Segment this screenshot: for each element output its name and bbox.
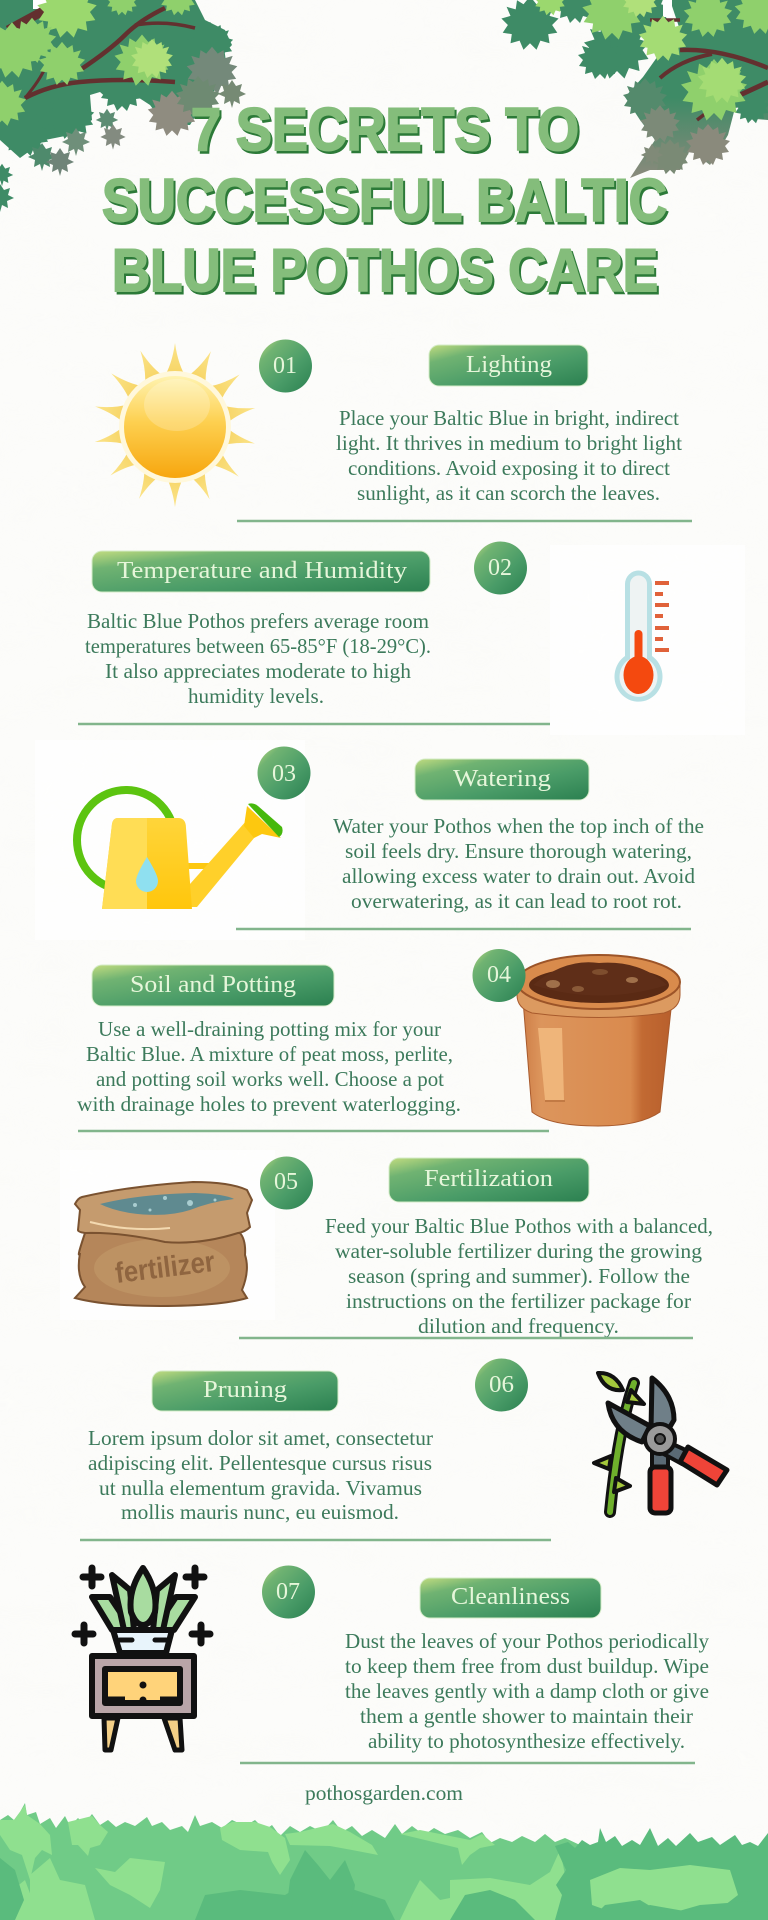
number badge 06	[475, 1358, 528, 1412]
text: fertilization: Feed your Baltic Blue Pothos with a balanced,	[325, 1214, 713, 1238]
text: pruning	[88, 1426, 433, 1524]
icon: sun	[92, 343, 258, 507]
text: watering: allowing excess water to drain out. Avoid	[342, 864, 695, 888]
text: watering: Water your Pothos when the top inch of the	[333, 814, 704, 838]
text: lighting: Place your Baltic Blue in bright, indirect	[339, 406, 679, 430]
text: temperature: humidity levels.	[188, 684, 324, 708]
heading: watering: Watering	[453, 766, 551, 792]
text: watering	[333, 814, 704, 913]
number badge 07	[262, 1566, 315, 1618]
number badge 04: 04	[487, 962, 511, 988]
text: temperature	[85, 609, 431, 708]
text: pruning: ut nulla elementum gravida. Vivamus	[99, 1476, 422, 1500]
text: fertilization	[325, 1214, 713, 1338]
text: cleanliness: ability to photosynthesize effectively.	[368, 1729, 685, 1753]
heading: temperature and humidity: Temperature and Humidity	[117, 558, 407, 584]
text: cleanliness	[345, 1629, 709, 1753]
number badge 07: 07	[276, 1579, 300, 1605]
number badge 02	[474, 542, 527, 594]
heading: watering	[415, 759, 589, 800]
text: soil and potting: Use a well-draining potting mix for your	[98, 1017, 441, 1041]
number badge 05	[260, 1156, 313, 1210]
bottom grass and foliage	[0, 1803, 768, 1920]
text: cleanliness: to keep them free from dust buildup. Wipe	[345, 1654, 709, 1678]
panel: 01 lighting	[92, 340, 692, 521]
icon: fertilizer sack	[75, 1182, 252, 1306]
title: SUCCESSFUL BALTIC	[104, 170, 669, 236]
text: cleanliness: Dust the leaves of your Pothos periodically	[345, 1629, 709, 1653]
title: BLUE POTHOS CARE	[114, 240, 660, 306]
light patch on dark foliage	[590, 1865, 738, 1915]
icon: fertilizer sack: fertilizer	[113, 1246, 217, 1290]
title: 7 SECRETS TO	[191, 96, 579, 163]
text: lighting	[336, 406, 682, 505]
text: fertilization: dilution and frequency.	[418, 1314, 619, 1338]
top left tree canopy	[0, 0, 246, 212]
icon: terracotta pot	[517, 955, 680, 1126]
panel: 05 fertilization	[75, 1156, 713, 1338]
text: fertilization: instructions on the fertilizer package for	[346, 1289, 691, 1313]
heading: fertilization: Fertilization	[424, 1166, 553, 1192]
panel: 03 watering	[77, 746, 704, 929]
panel: 07 cleanliness	[75, 1566, 709, 1763]
text: temperature: It also appreciates moderate to high	[105, 659, 412, 683]
heading: lighting: Lighting	[466, 352, 552, 378]
number badge 01	[259, 340, 312, 392]
text: soil and potting: and potting soil works well. Choose a pot	[96, 1067, 444, 1091]
heading: soil and potting: Soil and Potting	[130, 972, 296, 998]
text: fertilization: season (spring and summer). Follow the	[348, 1264, 690, 1288]
text: temperature: temperatures between 65-85°F (18-29°C).	[85, 634, 431, 658]
light leaf patches	[0, 1805, 578, 1920]
text: pruning: Lorem ipsum dolor sit amet, consectetur	[88, 1426, 433, 1450]
icon: watering can	[77, 790, 283, 909]
heading: pruning	[152, 1371, 338, 1411]
text: soil and potting: with drainage holes to prevent waterlogging.	[77, 1092, 461, 1116]
heading: cleanliness	[420, 1578, 601, 1618]
number badge 03	[258, 746, 310, 800]
number badge 03: 03	[272, 761, 296, 787]
text: watering: overwatering, as it can lead to root rot.	[351, 889, 682, 913]
text: lighting: sunlight, as it can scorch the leaves.	[357, 481, 660, 505]
text: lighting: conditions. Avoid exposing it to direct	[348, 456, 670, 480]
heading: pruning: Pruning	[203, 1377, 287, 1403]
panel: 06 pruning	[80, 1358, 727, 1540]
text: pruning: mollis mauris nunc, eu euismod.	[121, 1500, 399, 1524]
panel: 04 soil and potting	[77, 949, 680, 1131]
text: pruning: adipiscing elit. Pellentesque cursus risus	[88, 1451, 432, 1475]
number badge 04	[472, 949, 526, 1002]
text: temperature: Baltic Blue Pothos prefers average room	[87, 609, 429, 633]
heading: temperature and humidity	[92, 551, 430, 592]
heading: fertilization	[389, 1158, 589, 1202]
icon: pruning shears	[594, 1373, 727, 1513]
text: cleanliness: them a gentle shower to maintain their	[360, 1704, 693, 1728]
top right tree canopy	[501, 0, 768, 178]
text: soil and potting	[77, 1017, 461, 1116]
title	[102, 96, 669, 306]
title: BLUE POTHOS CARE	[112, 237, 658, 304]
text: fertilization: water-soluble fertilizer during the growing	[335, 1239, 702, 1263]
heading: soil and potting	[92, 965, 334, 1006]
heading: cleanliness: Cleanliness	[451, 1584, 570, 1610]
number badge 05: 05	[274, 1169, 298, 1195]
footer website: pothosgarden.com	[305, 1781, 463, 1805]
icon: clean potted plant on cabinet	[75, 1568, 210, 1750]
number badge 01: 01	[273, 353, 297, 379]
text: cleanliness: the leaves gently with a damp cloth or give	[345, 1679, 709, 1703]
text: lighting: light. It thrives in medium to bright light	[336, 431, 682, 455]
title: 7 SECRETS TO	[193, 98, 581, 166]
number badge 02: 02	[488, 555, 512, 581]
text: watering: soil feels dry. Ensure thorough watering,	[345, 839, 692, 863]
title: SUCCESSFUL BALTIC	[102, 167, 667, 234]
heading: lighting	[429, 345, 588, 386]
darker foliage	[0, 1828, 768, 1920]
number badge 06: 06	[489, 1372, 514, 1398]
icon: thermometer	[614, 570, 669, 702]
text: soil and potting: Baltic Blue. A mixture of peat moss, perlite,	[86, 1042, 453, 1066]
panel: 02 temperature and humidity	[78, 542, 669, 724]
